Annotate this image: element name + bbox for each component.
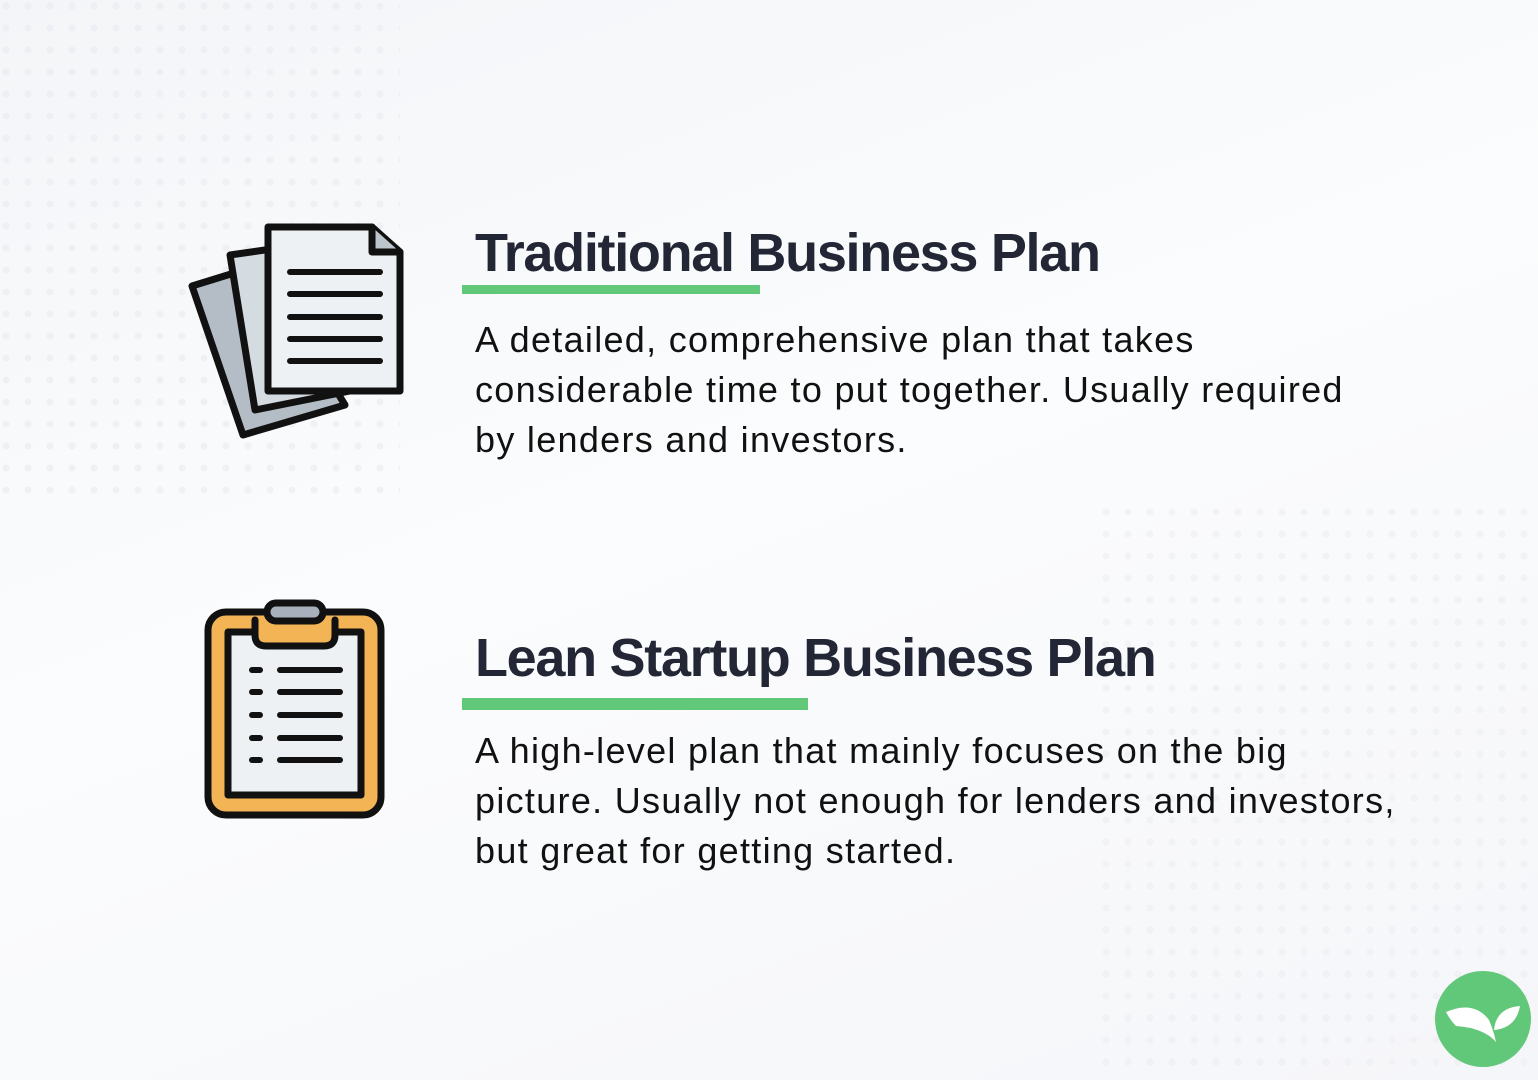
underline 2	[462, 698, 808, 710]
text: traditional description: considerable time to put together. Usually required	[475, 369, 1344, 410]
text: lean description: picture. Usually not enough for lenders and investors,	[475, 780, 1396, 821]
text: traditional description	[475, 319, 1344, 460]
text: traditional description: A detailed, comprehensive plan that takes	[475, 319, 1195, 360]
logo: leaf	[1435, 971, 1531, 1067]
text: lean description	[475, 730, 1396, 871]
text: lean description: A high-level plan that mainly focuses on the big	[475, 730, 1288, 771]
text: traditional description: by lenders and investors.	[475, 419, 908, 460]
heading: lean: Lean Startup Business Plan	[475, 628, 1155, 688]
icon: clipboard	[204, 600, 384, 818]
heading: traditional: Traditional Business Plan	[475, 223, 1100, 283]
icon: documents	[188, 224, 404, 438]
text: lean description: but great for getting started.	[475, 830, 956, 871]
underline 1	[462, 285, 760, 294]
